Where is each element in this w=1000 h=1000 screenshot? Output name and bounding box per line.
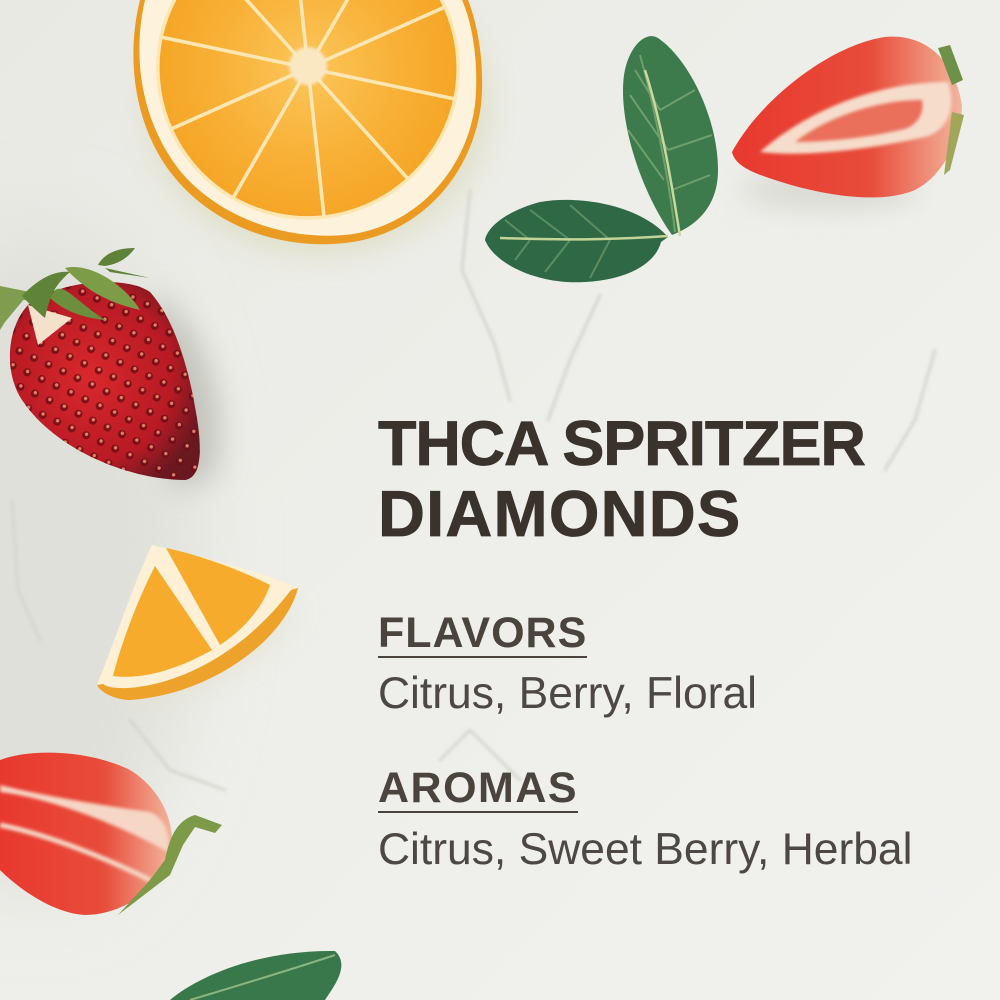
whole strawberry, left (0, 248, 220, 490)
title (378, 409, 866, 550)
text: aromas list: Citrus, Sweet Berry, Herbal (378, 825, 912, 874)
heading: flavors: FLAVORS (378, 609, 587, 657)
orange wedge (97, 545, 298, 700)
title: THCA SPRITZER (378, 409, 865, 479)
strawberry half, top right (732, 37, 964, 208)
text: flavors list: Citrus, Berry, Floral (378, 669, 757, 718)
title: DIAMONDS (378, 477, 741, 550)
orange slice, large (133, 0, 490, 255)
mint leaves, top (485, 36, 718, 282)
strawberry half, bottom left (0, 753, 222, 915)
mint leaf, bottom (170, 951, 341, 1000)
heading: aromas: AROMAS (378, 764, 578, 812)
